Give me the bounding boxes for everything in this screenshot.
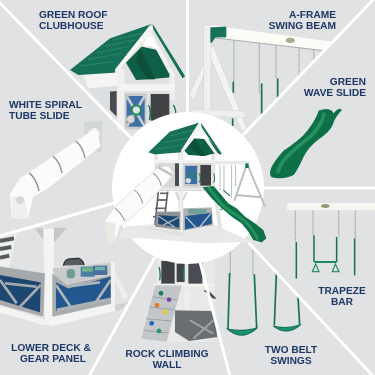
label: rock climbing wall: ROCK CLIMBING bbox=[125, 349, 209, 360]
label: two belt swings: SWINGS bbox=[270, 356, 312, 367]
panel: trapeze bar bbox=[287, 203, 375, 279]
panel: white spiral tube slide bbox=[10, 121, 102, 219]
center roof bbox=[148, 123, 222, 156]
center green slide bbox=[203, 186, 266, 242]
center swing frame bbox=[215, 161, 265, 210]
label: white spiral tube slide: TUBE SLIDE bbox=[9, 111, 70, 122]
label: lower deck and gear panel: GEAR PANEL bbox=[20, 354, 86, 365]
label: white spiral tube slide: WHITE SPIRAL bbox=[9, 100, 82, 111]
label: lower deck and gear panel: LOWER DECK & bbox=[11, 343, 91, 354]
label: a-frame swing beam: SWING BEAM bbox=[269, 21, 336, 32]
label: green roof clubhouse: CLUBHOUSE bbox=[39, 21, 104, 32]
center circle bbox=[112, 112, 264, 264]
label: green wave slide: WAVE SLIDE bbox=[304, 88, 366, 99]
panel: lower deck and gear panel bbox=[0, 228, 128, 327]
label: a-frame swing beam: A-FRAME bbox=[289, 10, 336, 21]
label: green roof clubhouse: GREEN ROOF bbox=[39, 10, 108, 21]
label: green wave slide: GREEN bbox=[330, 77, 366, 88]
center playset illustration bbox=[105, 123, 266, 244]
panel: green roof clubhouse bbox=[70, 24, 185, 130]
center tube slide bbox=[105, 166, 173, 244]
panel: rock climbing wall bbox=[141, 259, 217, 342]
panel: two belt swings bbox=[227, 250, 301, 335]
panel: a-frame swing beam bbox=[190, 25, 332, 132]
label: two belt swings: TWO BELT bbox=[265, 345, 317, 356]
label: trapeze bar: BAR bbox=[331, 297, 354, 308]
panel: green wave slide bbox=[270, 109, 342, 178]
label: trapeze bar: TRAPEZE bbox=[318, 286, 366, 297]
label: rock climbing wall: WALL bbox=[153, 360, 181, 371]
center tower bbox=[146, 150, 223, 239]
